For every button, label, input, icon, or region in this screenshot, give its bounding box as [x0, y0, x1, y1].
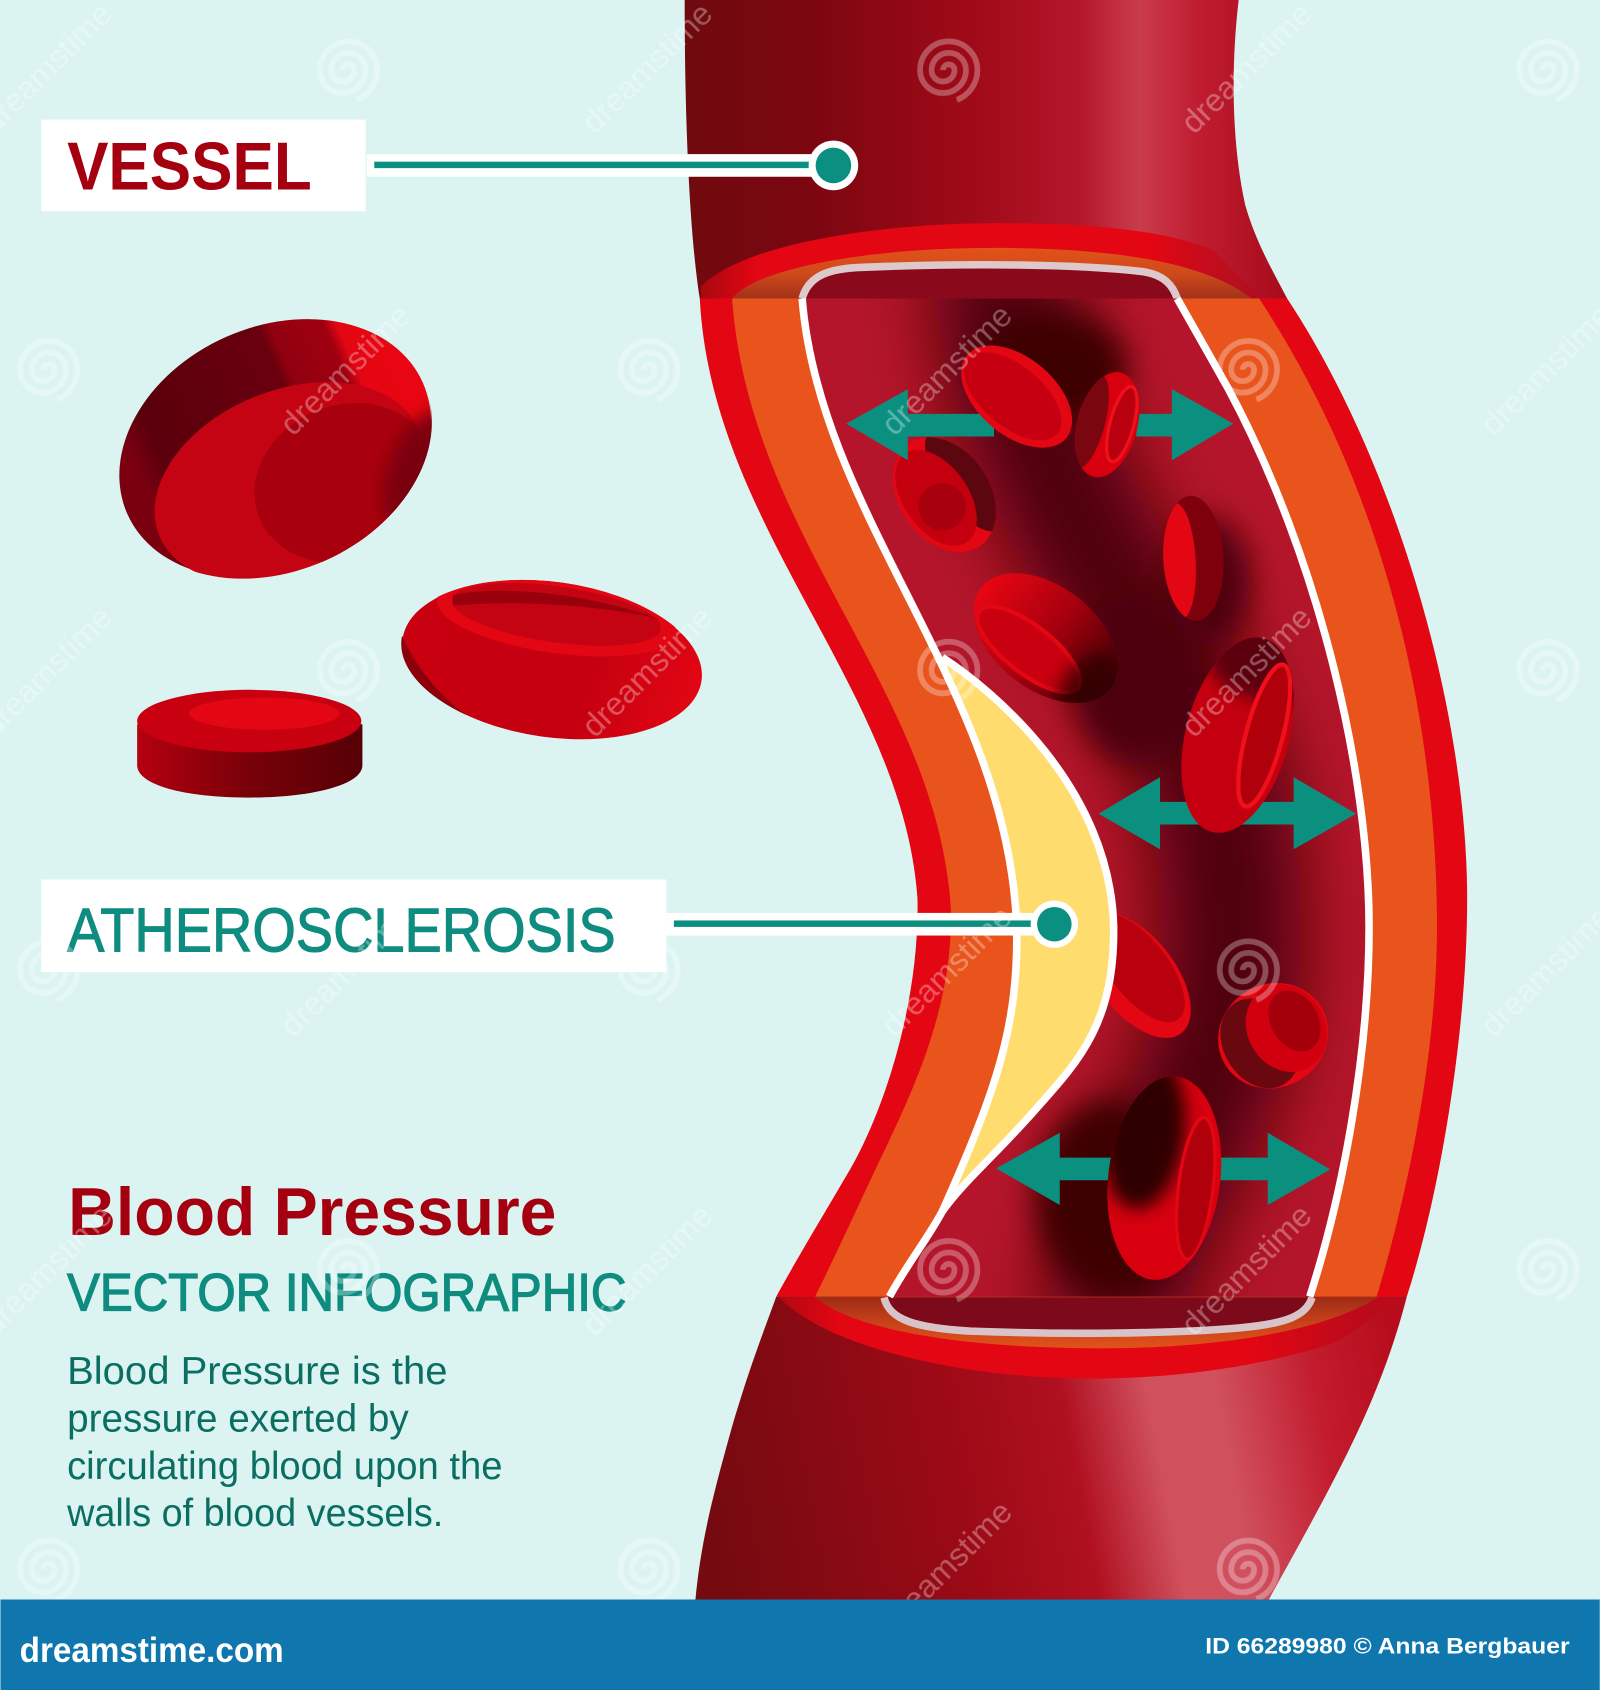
- watermark text: dreamstime: [1174, 599, 1318, 744]
- description paragraph: circulating blood upon the: [67, 1445, 503, 1488]
- upper cut rim: red wall: [701, 223, 1261, 299]
- right white inner lining: [1177, 299, 1369, 1297]
- description paragraph: pressure exerted by: [67, 1397, 409, 1440]
- label text: ATHEROSCLEROSIS: ATHEROSCLEROSIS: [67, 896, 616, 966]
- blood vessel illustration: [685, 0, 1467, 1599]
- free red blood cell: large tilted: [119, 319, 432, 579]
- watermark text: dreamstime: [574, 599, 719, 744]
- title: Blood Pressure: Blood Pressure: [68, 1175, 556, 1250]
- watermark text: dreamstime: [1174, 1197, 1318, 1342]
- red blood cell in vessel 6: [1181, 638, 1294, 833]
- lower cut rim: red wall: [778, 1297, 1407, 1379]
- watermark text: dreamstime: [874, 1493, 1019, 1638]
- lumen dark shading: [976, 248, 1251, 1336]
- upper vessel exterior: [685, 0, 1287, 299]
- watermark text: dreamstime: [272, 297, 417, 442]
- footer credit: ID 66289980 © Anna Bergbauer: [1205, 1633, 1570, 1658]
- free red blood cell: oval: [401, 580, 702, 740]
- label: atherosclerosis callout: [41, 879, 1078, 972]
- lower cut rim: inner lining: [884, 1298, 1312, 1333]
- red blood cell in vessel 2: [1074, 372, 1140, 478]
- teal arrows: bottom double-headed: [996, 1133, 1330, 1205]
- vessel lumen: [802, 299, 1369, 1297]
- watermark text: dreamstime: [874, 297, 1019, 442]
- label: vessel callout: [41, 120, 858, 211]
- description paragraph: [66, 1350, 503, 1535]
- discoid top face: [137, 690, 361, 752]
- vessel wall: orange layer: [732, 299, 1437, 1297]
- red blood cell in vessel 5: [974, 573, 1118, 703]
- watermark text: dreamstime: [574, 1197, 719, 1342]
- red blood cell in vessel 7: [1061, 894, 1212, 1057]
- upper cut rim: lining edge: [802, 265, 1177, 299]
- subtitle: Vector Infographic: VECTOR INFOGRAPHIC: [67, 1264, 626, 1323]
- leader dot: [1031, 901, 1078, 948]
- description paragraph: walls of blood vessels.: [66, 1492, 443, 1535]
- upper cut rim: orange layer: [732, 248, 1252, 299]
- watermark text: dreamstime: [874, 898, 1019, 1043]
- left white inner lining: [802, 299, 1017, 1297]
- watermark text: dreamstime: [272, 898, 417, 1043]
- leader line: [367, 154, 833, 177]
- vessel wall: outer red layer: [700, 299, 1467, 1297]
- upper cut rim: inner lining: [802, 265, 1177, 299]
- red blood cell in vessel 4: [1163, 496, 1224, 621]
- red blood cell in vessel 8: [1218, 982, 1328, 1089]
- teal arrow: top right: [1136, 389, 1233, 460]
- red blood cell in vessel 9: [1107, 1076, 1222, 1280]
- red blood cell in vessel 3: [892, 437, 996, 552]
- lower vessel exterior: [695, 1297, 1407, 1599]
- free red blood cell: discoid side view: [137, 690, 362, 798]
- leader line: [666, 913, 1054, 936]
- discoid highlight: [189, 697, 340, 730]
- teal arrow: top left: [846, 389, 994, 460]
- teal arrows: middle double-headed: [1099, 777, 1356, 849]
- lower cut rim: lining edge: [884, 1298, 1312, 1333]
- cell inner disc: [154, 382, 432, 579]
- cell shading and dimple: [401, 580, 676, 715]
- footer logo text: dreamstime.com: [20, 1630, 284, 1670]
- lower cut rim: orange layer: [815, 1297, 1379, 1348]
- atherosclerotic plaque: [939, 654, 1118, 1214]
- label text: VESSEL: VESSEL: [67, 130, 312, 205]
- leader dot: [809, 141, 858, 190]
- footer banner: [0, 1599, 1600, 1690]
- description paragraph: Blood Pressure is the: [67, 1350, 448, 1393]
- red blood cell in vessel 1: [942, 325, 1091, 468]
